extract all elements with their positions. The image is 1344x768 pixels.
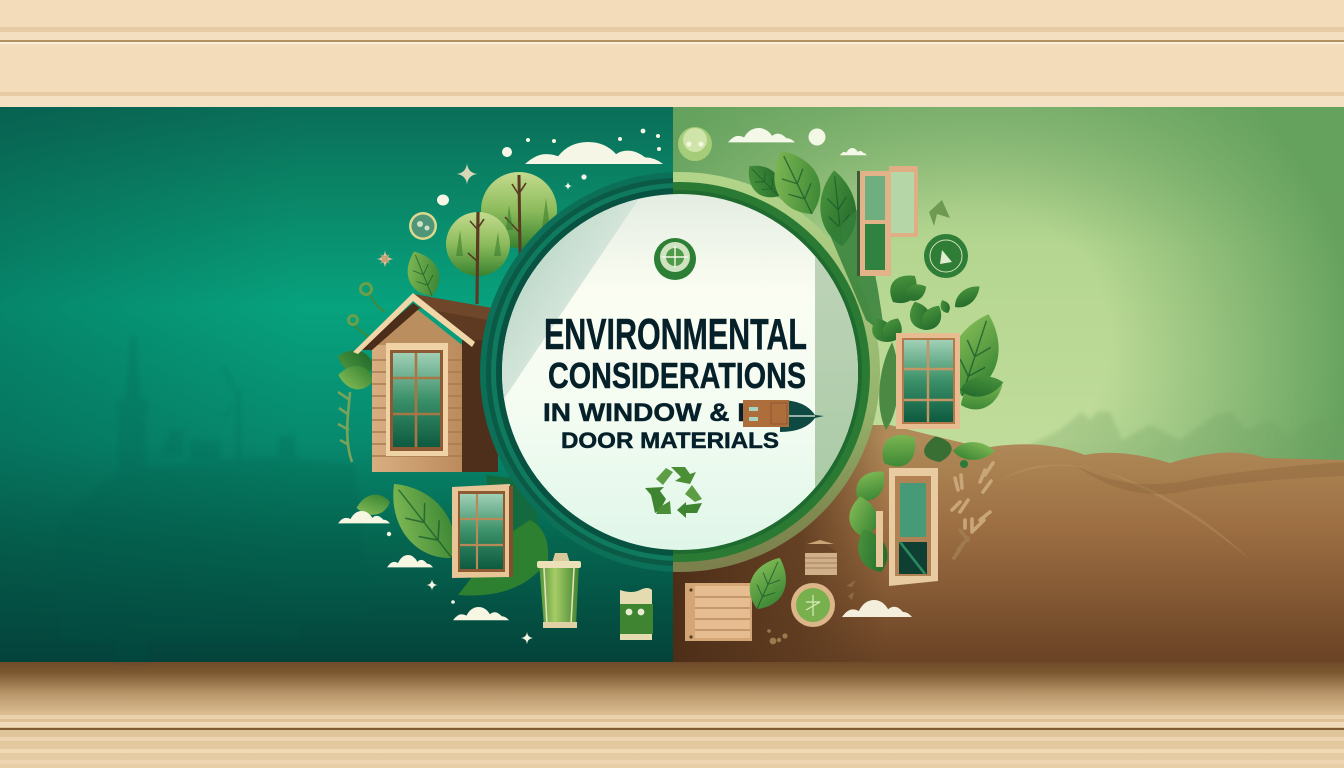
- right small icons: [678, 127, 968, 278]
- green bin: [620, 588, 653, 640]
- house: [353, 293, 498, 472]
- wood panel: [685, 583, 752, 641]
- leaves behind lower window: [376, 470, 548, 596]
- small wood shingle: [805, 540, 837, 575]
- left small icons and plant: [334, 212, 446, 518]
- recycle symbol: [645, 467, 702, 518]
- top center emblem: [654, 238, 696, 280]
- title: ENVIRONMENTAL: [544, 310, 807, 359]
- lower right leaves: [846, 425, 995, 577]
- bottom badge: [791, 583, 835, 627]
- main circle ring right: [673, 172, 880, 572]
- right upper leaves: [740, 142, 984, 431]
- bottom wood plank: [0, 662, 1344, 768]
- top wood plank: [0, 0, 1344, 107]
- bottom right cloud and pebbles: [767, 580, 912, 644]
- faint city skyline silhouette: [60, 336, 370, 662]
- lower window: [452, 484, 513, 578]
- tall door window: [889, 468, 938, 586]
- green cup: [537, 553, 581, 628]
- main circle glass disc: [490, 190, 865, 555]
- title: CONSIDERATIONS: [548, 355, 806, 396]
- door with leaf overlay: [743, 400, 824, 432]
- open window: [857, 166, 918, 276]
- leaf beside panel: [741, 551, 795, 616]
- top left cloud and stars: [437, 129, 663, 206]
- main circle ring left: [480, 172, 673, 572]
- faint tree line silhouette: [1030, 412, 1344, 462]
- wheat seeds: [952, 463, 993, 558]
- right green panel: [673, 107, 1344, 662]
- left green panel: [0, 107, 673, 662]
- title: IN WINDOW & I: [543, 399, 745, 427]
- right top clouds: [728, 128, 867, 155]
- title: DOOR MATERIALS: [561, 428, 779, 453]
- brown hills: [673, 425, 1344, 662]
- title: [543, 310, 807, 453]
- lower left clouds and stars: [338, 511, 533, 644]
- trees: [446, 172, 557, 304]
- middle right window and leaves: [896, 307, 1010, 429]
